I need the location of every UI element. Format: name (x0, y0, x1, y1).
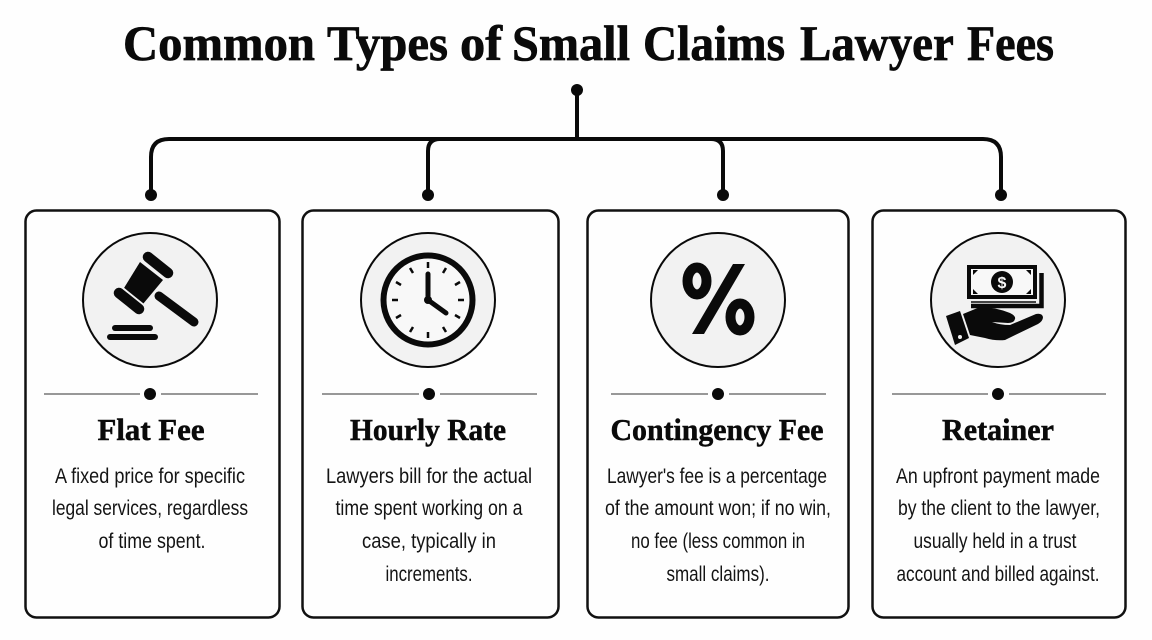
title: Claims (643, 15, 785, 71)
description: legal services, regardless (52, 497, 248, 520)
description: increments. (386, 563, 472, 586)
description: An upfront payment made (896, 465, 1100, 488)
description: by the client to the lawyer, (898, 497, 1100, 520)
heading: Flat Fee (98, 412, 204, 447)
description: usually held in a trust (914, 530, 1077, 553)
title: Common (123, 15, 315, 71)
divider (611, 388, 826, 400)
heading: Contingency Fee (610, 412, 824, 447)
description: Lawyer's fee is a percentage (607, 465, 827, 488)
description (896, 465, 1100, 586)
heading: Hourly Rate (350, 412, 506, 447)
description: small claims). (666, 563, 770, 586)
title: Fees (967, 15, 1054, 71)
panel: flat fee (26, 210, 280, 618)
icon: money in hand: $ (998, 275, 1007, 292)
icon: money in hand (931, 233, 1065, 367)
connector tree (145, 84, 1007, 201)
description: case, typically in (362, 530, 496, 553)
divider (322, 388, 537, 400)
divider (892, 388, 1106, 400)
description (605, 465, 831, 586)
description: no fee (less common in (631, 530, 805, 553)
description: time spent working on a (336, 497, 523, 520)
title: Small (512, 15, 630, 71)
description (326, 465, 532, 586)
description: of the amount won; if no win, (605, 497, 831, 520)
panel: retainer (872, 210, 1126, 618)
title: Types (327, 15, 448, 71)
description: account and billed against. (896, 563, 1100, 586)
heading: Retainer (942, 412, 1054, 447)
icon: gavel (83, 233, 217, 367)
description (52, 465, 248, 553)
description: A fixed price for specific (55, 465, 245, 488)
description: Lawyers bill for the actual (326, 465, 532, 488)
icon: percent (651, 233, 785, 367)
description: of time spent. (98, 530, 206, 553)
icon: clock (361, 233, 495, 367)
panel: contingency fee (588, 210, 848, 618)
title: of (460, 15, 503, 71)
panel: hourly rate (302, 210, 558, 618)
title: Lawyer (800, 15, 954, 71)
divider (44, 388, 258, 400)
